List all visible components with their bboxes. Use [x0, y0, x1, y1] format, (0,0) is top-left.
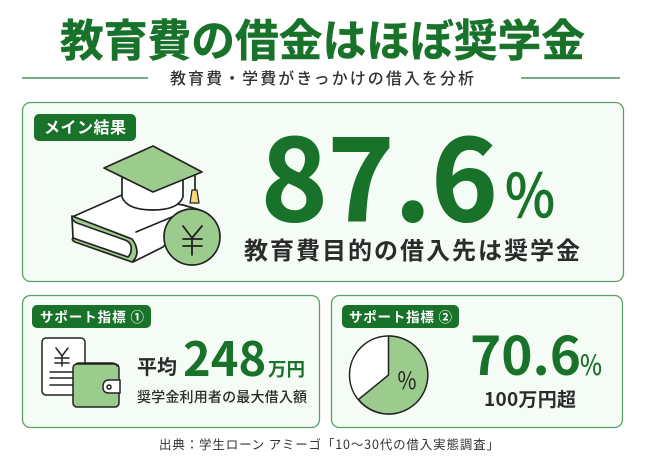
panel: main result [22, 90, 624, 282]
metric: 248: 平均 [137, 351, 177, 380]
metric caption: 奨学金利用者の最大借入額 [137, 387, 307, 407]
icon: book, graduation cap and yen coin [72, 146, 220, 265]
main figure: 87.6 [261, 90, 498, 254]
chart: pie [350, 336, 428, 414]
source: 出典：学生ローン アミーゴ「10〜30代の借入実態調査」 [159, 434, 499, 453]
badge: support metric 1: サポート指標 ① [40, 306, 144, 326]
panel: support metric 2 [332, 296, 622, 428]
metric: 248: 万円 [268, 356, 305, 382]
metric: 248 [137, 321, 305, 390]
subtitle: 教育費・学費がきっかけの借入を分析 [170, 65, 474, 89]
panel: support metric 1 [22, 296, 320, 428]
metric: 70.6: % [580, 344, 602, 384]
metric: 248: 248 [183, 321, 266, 390]
metric: 70.6: 70.6 [470, 315, 581, 391]
main caption: 教育費目的の借入先は奨学金 [244, 231, 580, 266]
badge: main result: メイン結果 [44, 114, 126, 138]
icon: receipt and wallet [42, 338, 120, 407]
main figure: % [505, 148, 555, 235]
badge: support metric 2: サポート指標 ② [349, 306, 452, 326]
metric caption: 100万円超 [484, 385, 576, 412]
title: 教育費の借金はほぼ奨学金 [60, 5, 585, 69]
chart: pie: % [398, 361, 416, 396]
